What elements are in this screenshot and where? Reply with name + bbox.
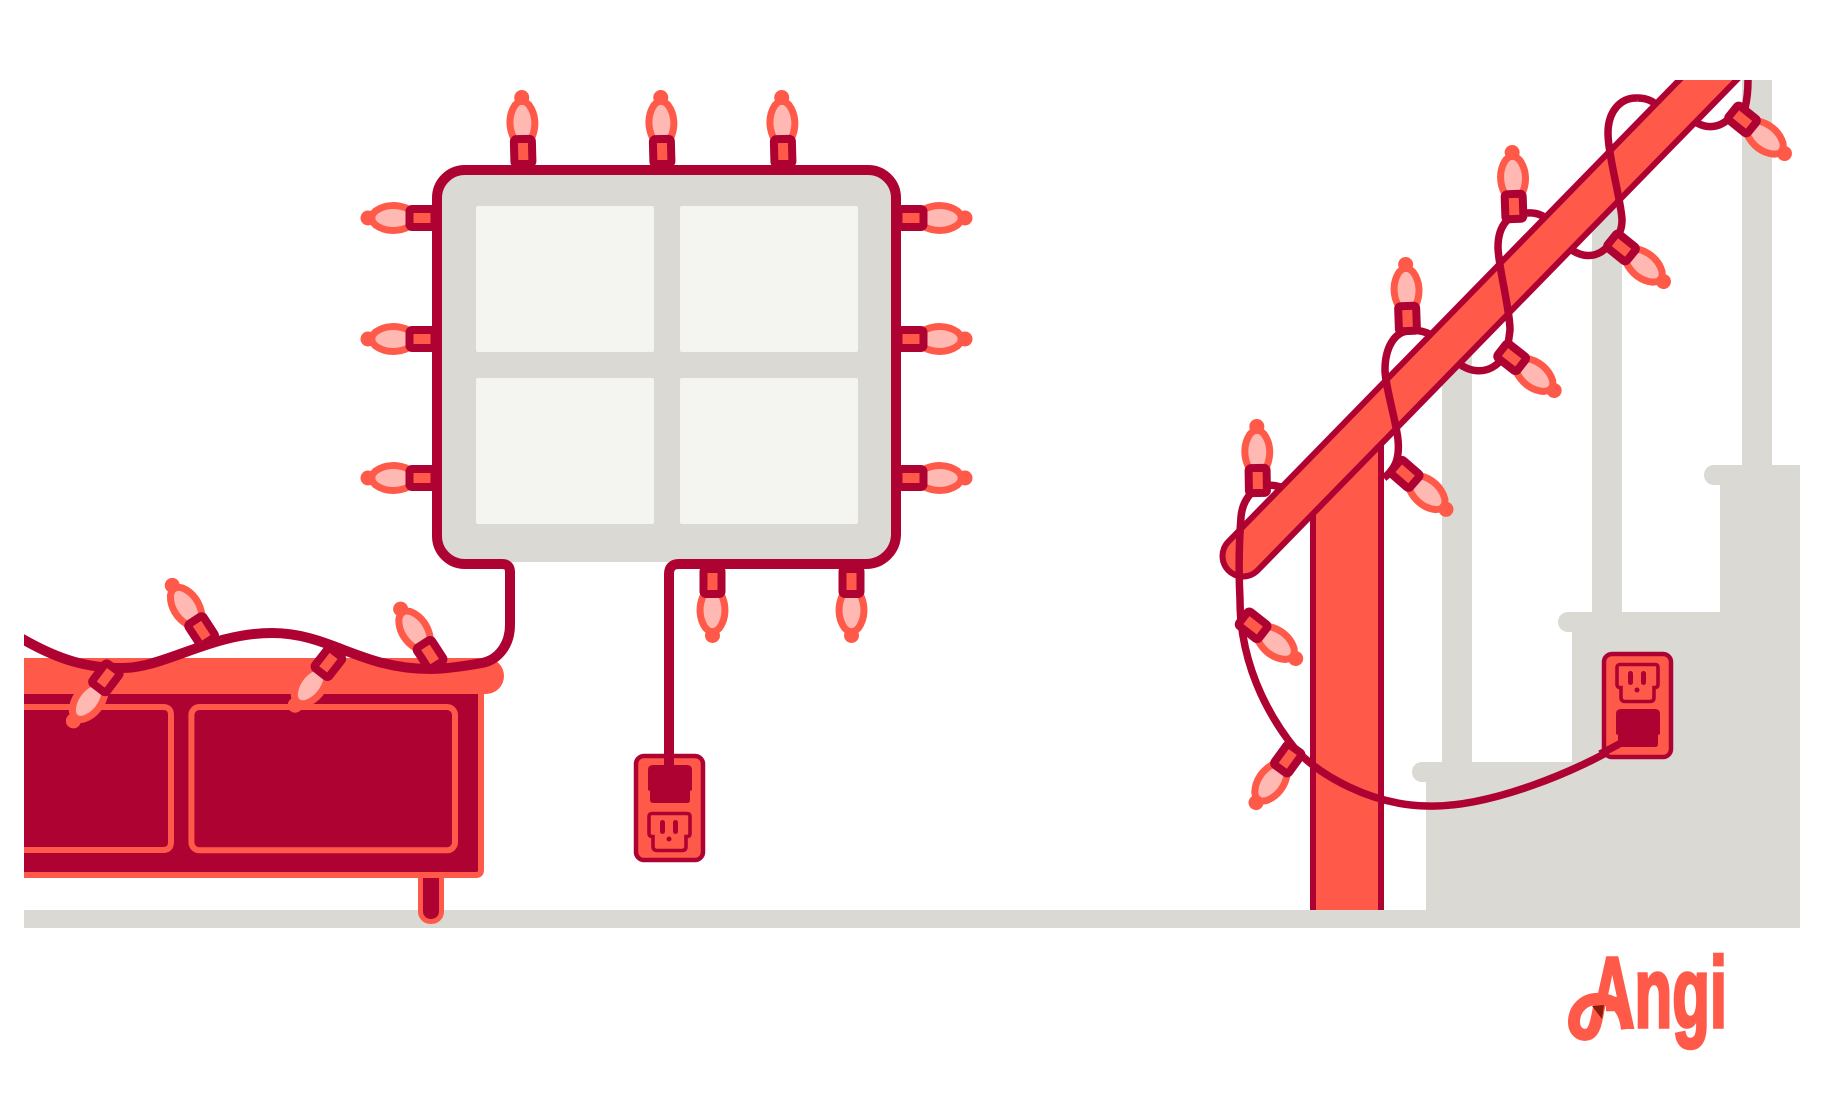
window <box>437 170 896 562</box>
stair lights <box>1236 102 1798 816</box>
cabinet body <box>10 685 481 875</box>
window frame <box>437 170 896 562</box>
cord segments over the railing <box>1239 80 1748 806</box>
window lights: left <box>360 206 434 490</box>
cabinet leg <box>420 860 442 922</box>
window lights: top <box>509 90 796 164</box>
window lights: right <box>898 206 972 490</box>
left cabinet door <box>10 707 171 850</box>
cord segments behind the railing <box>1258 98 1735 495</box>
right cabinet door <box>191 707 455 850</box>
outlet: stairs <box>1600 654 1671 757</box>
logo: Angi <box>1568 937 1727 1049</box>
window lights: bottom <box>700 569 864 643</box>
floor <box>24 910 1800 928</box>
outlet: window cord <box>636 750 703 860</box>
newel post <box>1313 435 1381 910</box>
light cord around cabinet and window <box>14 170 896 750</box>
cabinet lights <box>59 572 447 734</box>
window panes <box>476 206 858 524</box>
logo: Angi: Angi <box>1590 937 1727 1049</box>
cabinet countertop <box>24 658 504 694</box>
staircase wall and steps <box>1412 80 1800 928</box>
stair railing <box>1220 80 1741 580</box>
cabinet <box>10 658 504 875</box>
